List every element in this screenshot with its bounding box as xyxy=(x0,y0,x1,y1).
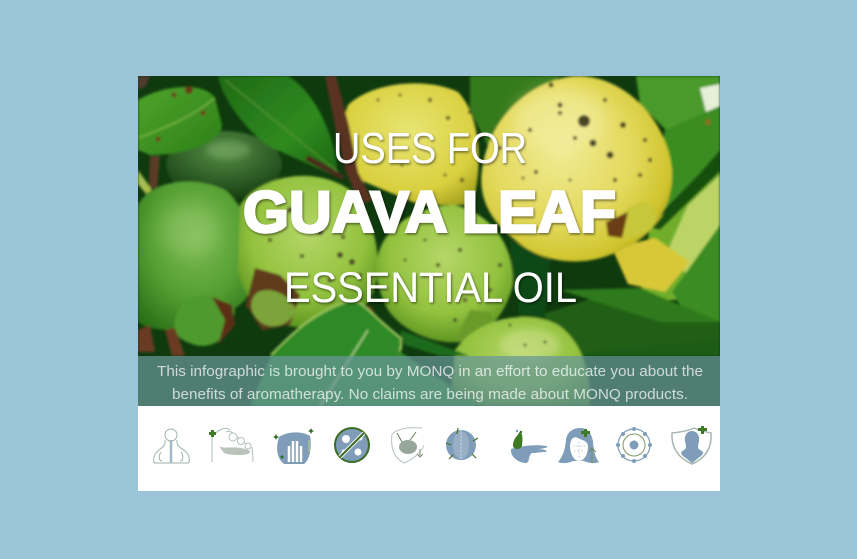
right dark leaf stripe xyxy=(652,150,720,230)
icon: neck and back xyxy=(154,429,189,463)
left green fruit xyxy=(138,182,255,330)
icon: oil on hand xyxy=(511,430,547,463)
background foliage xyxy=(636,76,720,132)
leaf spots xyxy=(156,86,711,142)
lower fruit xyxy=(450,317,590,406)
caption line 1: This infographic is brought to you by MONQ in an effort to educate you about the xyxy=(157,363,703,380)
right lime fruit xyxy=(376,205,513,342)
bottom centre leaf xyxy=(250,302,420,406)
icon: foot xyxy=(209,428,253,462)
translucent caption band xyxy=(138,356,720,406)
title line: uses for: USES FOR xyxy=(333,124,527,173)
icon: no bacteria xyxy=(335,428,369,462)
icon row xyxy=(154,426,711,464)
icon: immune shield xyxy=(672,426,711,464)
dark fruit behind xyxy=(166,131,282,199)
fruit speckles xyxy=(268,82,652,346)
icon: cell xyxy=(446,428,478,461)
caption text xyxy=(157,363,703,403)
title line: essential oil: ESSENTIAL OIL xyxy=(284,264,577,312)
top-left leaf xyxy=(138,87,222,155)
yellow fruit big xyxy=(481,76,672,261)
branch xyxy=(325,76,372,205)
icon: muscle xyxy=(392,428,424,463)
icon: molecule xyxy=(616,427,652,463)
big dark leaf xyxy=(218,76,338,177)
title xyxy=(243,124,616,312)
guava photo xyxy=(138,76,720,406)
card panel xyxy=(138,76,720,491)
caption line 2: benefits of aromatherapy. No claims are being made about MONQ products. xyxy=(172,386,688,403)
middle lime fruit xyxy=(238,176,378,328)
icon: face xyxy=(558,428,599,463)
yellow fruit 2 xyxy=(340,83,479,205)
title line: guava leaf: GUAVA LEAF xyxy=(243,180,616,245)
icon: hand on skin xyxy=(273,428,314,464)
